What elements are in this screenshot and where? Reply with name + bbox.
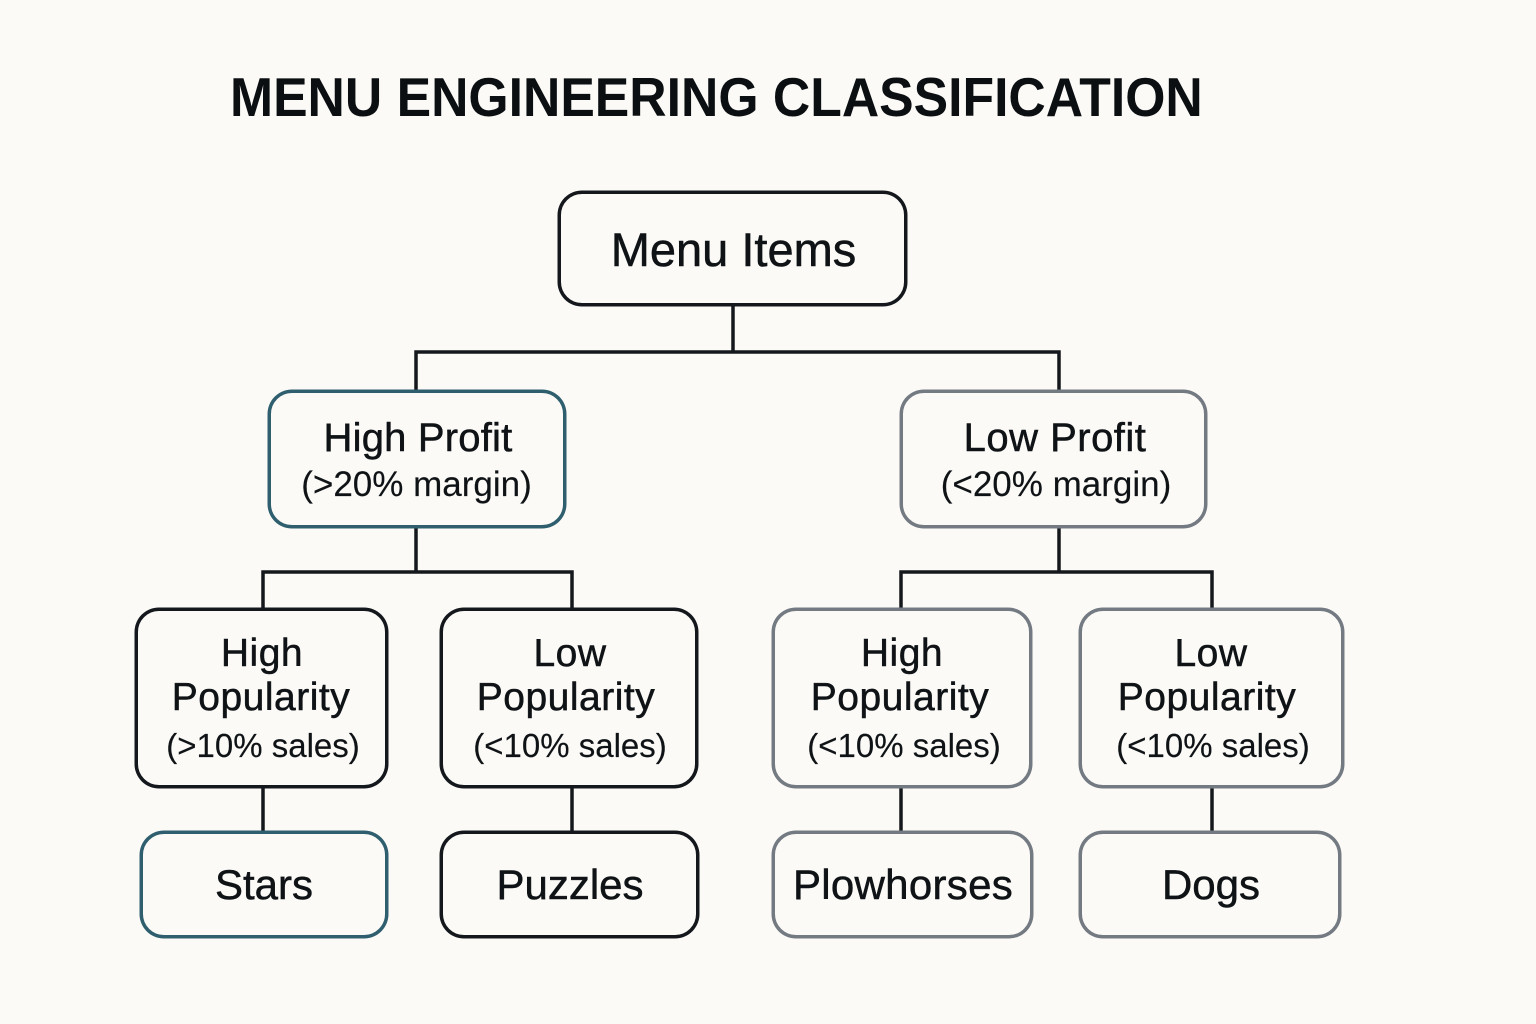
box: High Popularity (low profit): Popularity	[811, 676, 989, 719]
box: Menu Items: Menu Items	[611, 223, 856, 276]
box: Low Popularity (low profit): Low	[1174, 632, 1248, 675]
box: Low Popularity (high profit)	[440, 608, 698, 788]
box: Dogs	[1079, 831, 1341, 938]
box: Plowhorses	[772, 831, 1033, 938]
box: Puzzles: Puzzles	[496, 861, 644, 908]
box: Low Popularity (high profit): Low	[533, 632, 607, 675]
box: High Popularity (low profit): (<10% sales)	[807, 727, 1001, 764]
box: High Profit: High Profit	[324, 416, 512, 460]
box: Stars	[140, 831, 388, 938]
box: High Profit	[268, 390, 566, 528]
title: MENU ENGINEERING CLASSIFICATION	[230, 66, 1203, 128]
box: Stars: Stars	[215, 861, 313, 908]
box: Menu Items	[558, 191, 907, 306]
box: Low Popularity (high profit): (<10% sales)	[473, 727, 667, 764]
box: Low Popularity (low profit): Popularity	[1118, 676, 1296, 719]
box: Low Popularity (low profit): (<10% sales)	[1116, 727, 1310, 764]
box: Dogs: Dogs	[1162, 861, 1260, 908]
box: High Popularity (high profit)	[135, 608, 388, 788]
box: High Popularity (high profit): High	[221, 632, 303, 675]
box: High Popularity (low profit): High	[861, 632, 943, 675]
box: Puzzles	[440, 831, 699, 938]
box: Low Popularity (high profit): Popularity	[477, 676, 655, 719]
box: High Popularity (high profit): (>10% sales)	[166, 727, 360, 764]
box: Low Popularity (low profit)	[1079, 608, 1344, 788]
box: High Popularity (low profit)	[772, 608, 1032, 788]
box: Low Profit: (<20% margin)	[941, 465, 1171, 504]
box: Low Profit: Low Profit	[964, 416, 1146, 460]
box: Low Profit	[900, 390, 1207, 528]
box: High Popularity (high profit): Popularity	[172, 676, 350, 719]
box: Plowhorses: Plowhorses	[793, 861, 1013, 908]
box: High Profit: (>20% margin)	[301, 465, 532, 504]
